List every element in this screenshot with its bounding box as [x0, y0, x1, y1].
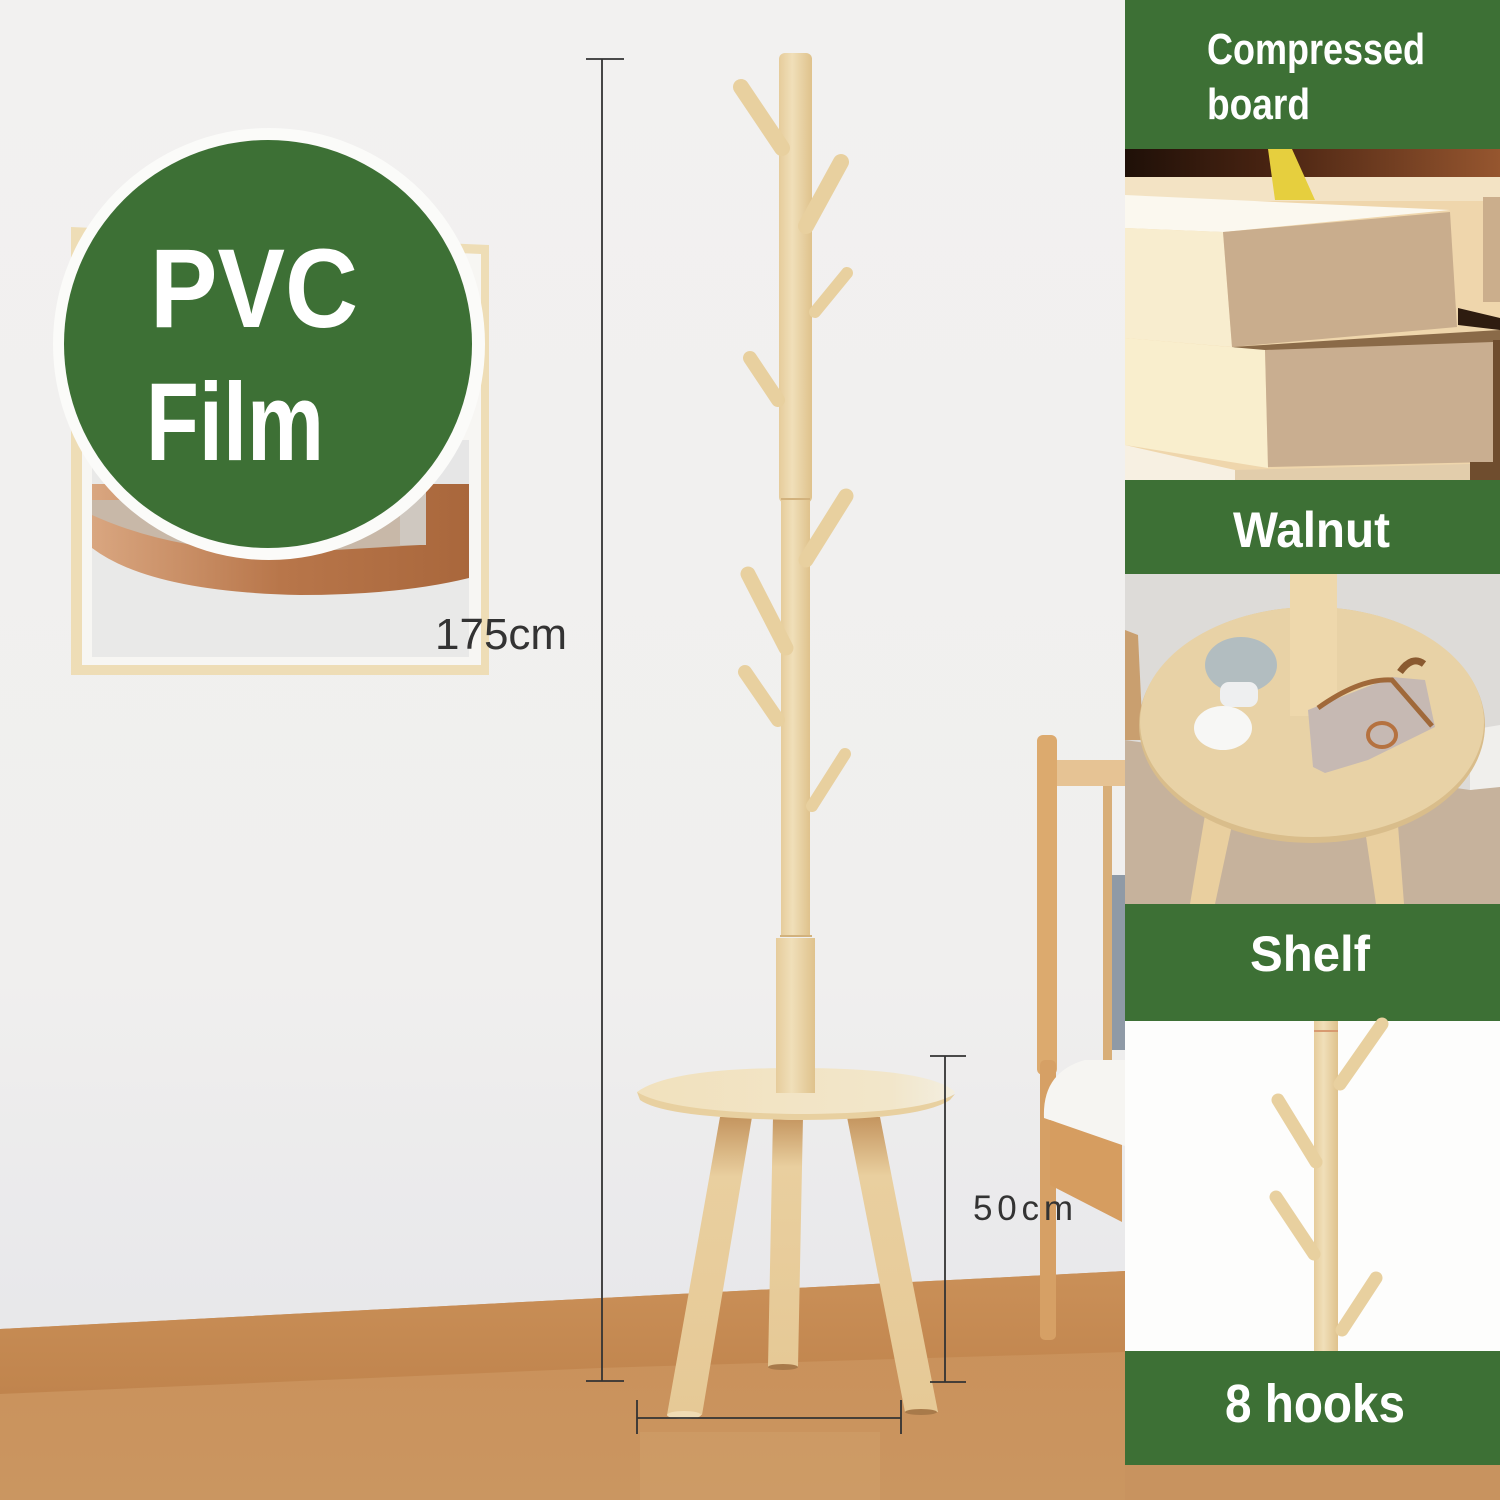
label: shelf: [1125, 904, 1500, 1021]
right column background: [1125, 0, 1500, 1500]
photo: round shelf with objects: [1125, 574, 1500, 904]
badge: PVC Film: PVC: [150, 226, 358, 351]
badge: PVC Film: Film: [146, 361, 324, 484]
rack round shelf: [637, 1068, 955, 1120]
label: compressed board: [1125, 0, 1500, 149]
floor strip under labels: [1125, 1465, 1500, 1500]
label: 8 hooks: [1125, 1351, 1500, 1465]
wooden floor: [0, 1271, 1125, 1500]
panel: shelf: [1125, 904, 1500, 1351]
white dish: [1194, 706, 1252, 750]
dimension: base width: [637, 1400, 901, 1434]
picture: wooden tray: [92, 484, 469, 595]
dimension: 50cm: 50cm: [973, 1189, 1073, 1228]
dimension: 175cm: [435, 59, 624, 1381]
label: compressed board: Compressed: [1207, 25, 1425, 74]
label: compressed board: board: [1207, 80, 1310, 129]
badge: PVC Film: [53, 128, 485, 560]
label: walnut: [1125, 480, 1500, 574]
panel: walnut: [1125, 480, 1500, 904]
dimension: 50cm: [930, 1056, 1073, 1382]
rack pole: [776, 53, 815, 1093]
rack legs: [667, 1117, 938, 1419]
wall picture frame: [71, 227, 489, 675]
rack hooks: [741, 87, 847, 806]
dimension: 175cm: 175cm: [435, 610, 567, 659]
photo: hook close-up: [1125, 1021, 1500, 1351]
label: 8 hooks: 8 hooks: [1225, 1374, 1405, 1434]
panel: compressed board: [1125, 0, 1500, 480]
chair: [1037, 735, 1125, 1340]
coat rack product: [637, 53, 955, 1419]
label: shelf: Shelf: [1250, 926, 1370, 982]
handbag: [1308, 661, 1435, 773]
flower vase: [1205, 637, 1277, 707]
photo: stacked boards: [1125, 149, 1500, 480]
label: walnut: Walnut: [1233, 502, 1390, 558]
